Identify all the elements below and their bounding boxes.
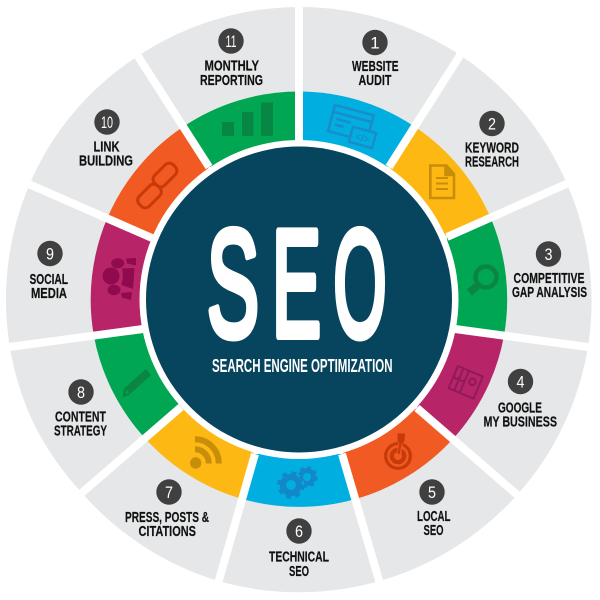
label: technical seo xyxy=(269,550,329,580)
label: press posts citations: CITATIONS xyxy=(138,524,196,540)
icon: gears xyxy=(278,468,316,498)
label: keyword research: KEYWORD xyxy=(465,140,519,156)
panel: 7 press posts citations xyxy=(82,407,255,581)
label: link building xyxy=(79,140,133,170)
number badge 1 xyxy=(362,30,388,55)
title: SEO: E xyxy=(272,199,321,369)
panel: 8 content strategy xyxy=(8,329,181,493)
icon: document xyxy=(430,166,454,198)
label: website audit: WEBSITE xyxy=(352,59,399,75)
number badge 3 xyxy=(536,241,561,267)
label: competitive gap analysis xyxy=(512,271,587,301)
label: keyword research: RESEARCH xyxy=(465,154,519,170)
label: monthly reporting xyxy=(200,58,263,89)
label: technical seo: TECHNICAL xyxy=(269,550,329,566)
label: content strategy xyxy=(54,410,107,440)
panel: 4 google my business xyxy=(417,329,588,495)
icon: people group xyxy=(102,258,136,300)
icon: web window with code: </> xyxy=(354,132,371,146)
subtitle: SEARCH ENGINE OPTIMIZATION xyxy=(212,355,392,376)
number badge 6 xyxy=(286,518,312,544)
icon: storefront map xyxy=(449,366,483,399)
label: social media: SOCIAL xyxy=(30,272,68,288)
label: google my business: GOOGLE xyxy=(498,400,542,416)
panel: 10 link building xyxy=(29,56,209,238)
number badge 2 xyxy=(479,111,505,136)
icon: rss feed xyxy=(190,439,219,469)
panel: 3 competitive gap analysis xyxy=(447,184,592,347)
number badge 9: 9 xyxy=(46,244,54,264)
label: content strategy: STRATEGY xyxy=(54,424,107,440)
label: monthly reporting: MONTHLY xyxy=(204,58,259,74)
label: google my business xyxy=(484,400,557,430)
label: website audit: AUDIT xyxy=(358,73,392,89)
number badge 11 xyxy=(218,28,244,54)
label: press posts citations xyxy=(125,510,209,540)
center circle xyxy=(146,146,452,452)
label: google my business: MY BUSINESS xyxy=(484,414,557,430)
label: local seo xyxy=(417,509,451,539)
icon: magnifier xyxy=(470,266,496,292)
number badge 1: 1 xyxy=(370,34,380,52)
icon: bar chart xyxy=(222,102,273,136)
label: link building: LINK xyxy=(94,140,120,156)
panel: 11 monthly reporting xyxy=(138,7,299,167)
number badge 10 xyxy=(94,109,120,135)
label: press posts citations: PRESS, POSTS & xyxy=(125,510,209,526)
icon: chain links xyxy=(135,161,179,210)
number badge 7: 7 xyxy=(165,483,173,502)
number badge 9 xyxy=(37,241,63,266)
panel: 1 website audit xyxy=(299,7,460,167)
label: social media: MEDIA xyxy=(31,286,67,302)
number badge 4: 4 xyxy=(516,372,524,392)
number badge 6: 6 xyxy=(295,522,303,541)
number badge 3: 3 xyxy=(544,245,552,264)
number badge 7 xyxy=(156,479,182,505)
panel: 5 local seo xyxy=(342,408,517,581)
number badge 11: 11 xyxy=(226,32,236,51)
center circle: O xyxy=(334,199,386,369)
number badge 8 xyxy=(68,379,94,405)
panel: 9 social media xyxy=(4,184,152,347)
label: local seo: SEO xyxy=(424,523,444,539)
icon: web window with code xyxy=(327,105,380,148)
label: link building: BUILDING xyxy=(79,154,133,170)
title: SEO: S xyxy=(207,199,259,369)
number badge 2: 2 xyxy=(488,114,496,134)
label: keyword research xyxy=(465,140,519,170)
number badge 5: 5 xyxy=(428,483,436,502)
label: local seo: LOCAL xyxy=(417,509,451,525)
icon: pencil xyxy=(122,369,151,398)
label: monthly reporting: REPORTING xyxy=(200,73,263,89)
number badge 4 xyxy=(508,369,533,394)
label: content strategy: CONTENT xyxy=(55,410,106,426)
number badge 5 xyxy=(419,479,445,505)
title: SEO xyxy=(207,199,386,369)
panel: 6 technical seo xyxy=(218,454,380,592)
number badge 8: 8 xyxy=(77,383,85,402)
label: website audit xyxy=(352,59,399,89)
icon: target with dart xyxy=(384,434,412,470)
label: technical seo: SEO xyxy=(289,564,309,580)
label: social media xyxy=(30,272,68,302)
panel: 2 keyword research xyxy=(389,55,567,237)
number badge 10: 10 xyxy=(101,113,113,132)
